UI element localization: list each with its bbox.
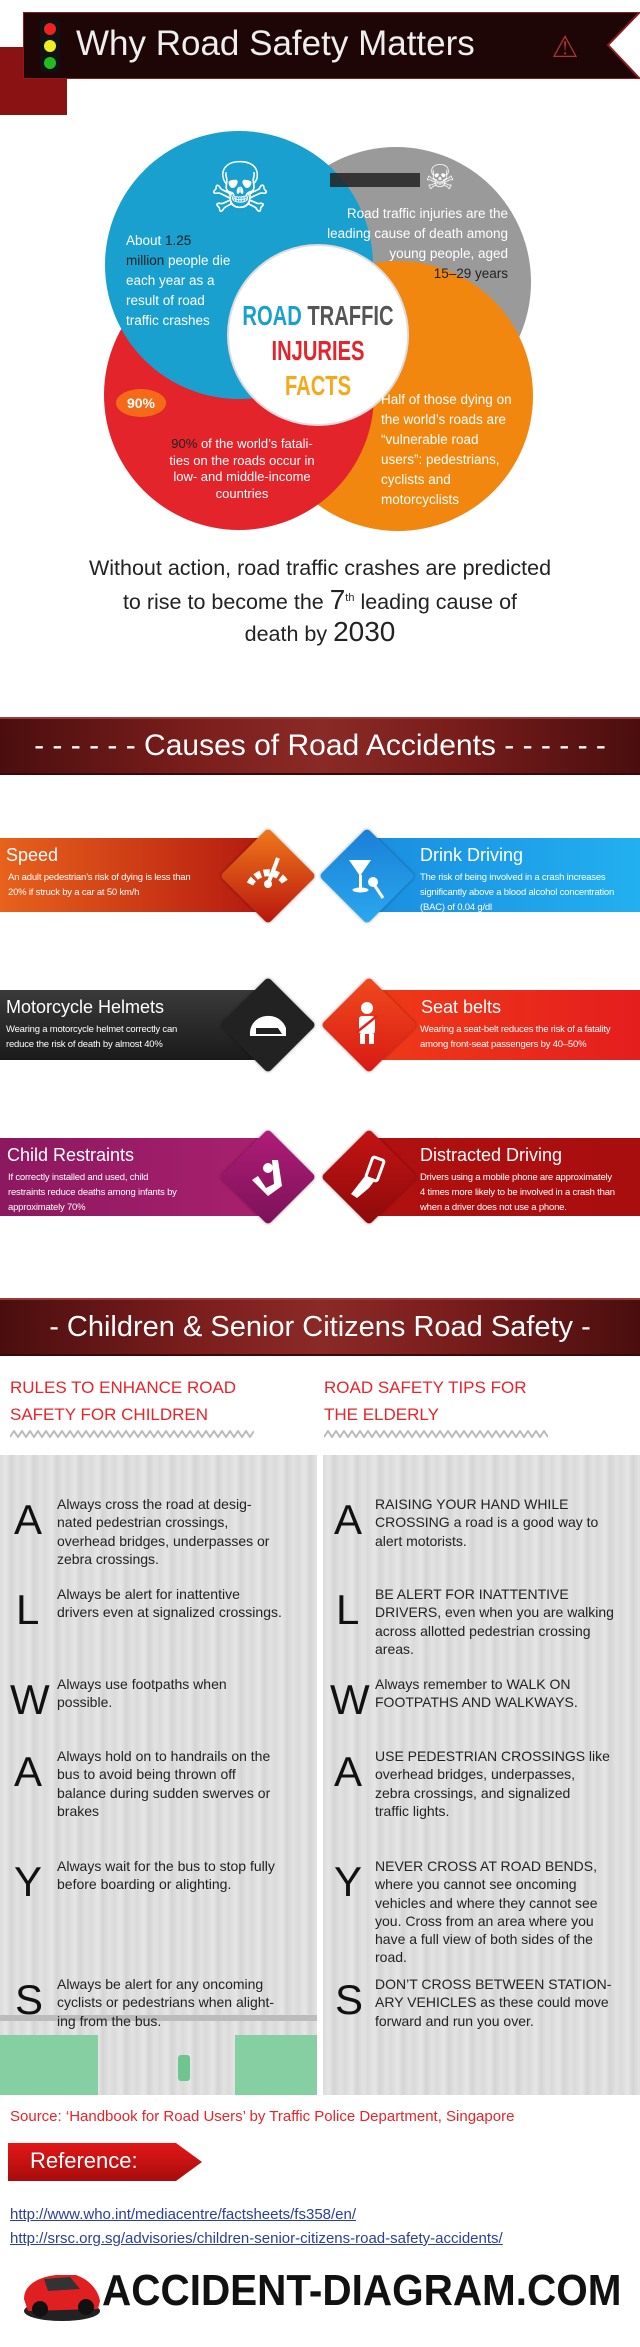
tip W: Always remember to WALK ON <box>375 1676 571 1692</box>
icon: red car <box>24 2275 100 2321</box>
rule A: zebra crossings. <box>57 1551 159 1567</box>
text: gray circle: Road traffic injuries are the <box>347 206 508 221</box>
heading text: Why Road Safety Matters <box>76 24 475 63</box>
banner: Causes of Road Accidents <box>0 717 640 775</box>
cause: Drink Driving: (BAC) of 0.04 g/dl <box>420 902 492 913</box>
rule A2: A <box>14 1748 42 1795</box>
rule A2 <box>14 1748 270 1819</box>
banner: Children & Senior Citizens Road Safety <box>0 1298 640 1356</box>
icon: speedometer <box>246 857 288 888</box>
text: orange circle: users”: pedestrians, <box>381 452 500 467</box>
text: gray circle <box>327 206 508 281</box>
tip S: DON’T CROSS BETWEEN STATION- <box>375 1976 611 1992</box>
source note: Source: ‘Handbook for Road Users’ by Traffic Police Department, Singapore <box>10 2108 514 2125</box>
cause: Child Restraints: approximately 70% <box>8 1202 85 1213</box>
center label <box>242 300 394 401</box>
icon: warning sign car: ⚠ <box>552 31 578 64</box>
badge: 90% <box>116 389 166 417</box>
banner: Children & Senior Citizens Road Safety: - Children & Senior Citizens Road Safety - <box>49 1311 591 1343</box>
rule A2: balance during sudden swerves or <box>57 1785 270 1801</box>
cause: Child Restraints: restraints reduce deaths among infants by <box>8 1187 177 1198</box>
tip A2 <box>334 1748 610 1819</box>
reference links: http://srsc.org.sg/advisories/children-senior-citizens-road-safety-accidents/ <box>10 2230 503 2247</box>
text: blue circle: million people die <box>126 253 230 268</box>
icon: cocktail and key <box>349 860 384 899</box>
text: red circle: ties on the roads occur in <box>169 452 315 468</box>
cause: Distracted Driving: Distracted Driving <box>420 1145 562 1165</box>
icon: skull blue: ☠ <box>209 149 271 227</box>
text: gray circle: 15–29 years <box>434 266 508 281</box>
rule S <box>15 1976 274 2029</box>
cause: Seat belts <box>320 976 640 1074</box>
icon: child seat <box>252 1160 282 1196</box>
icon: skull gray: ☠ <box>425 159 455 197</box>
text: blue circle: result of road <box>126 293 205 308</box>
cause: Drink Driving: Drink Driving <box>420 845 523 865</box>
tip L: L <box>336 1586 359 1633</box>
heading: rules for children <box>10 1378 254 1438</box>
cause: Speed: 20% if struck by a car at 50 km/h <box>8 887 139 898</box>
tip A2: overhead bridges, underpasses, <box>375 1766 575 1782</box>
center label: INJURIES <box>272 335 364 366</box>
rule S: S <box>15 1976 43 2023</box>
text: red circle <box>169 436 315 500</box>
cause: Distracted Driving: 4 times more likely to be involved in a crash than <box>420 1187 615 1198</box>
cause: Distracted Driving <box>320 1128 640 1226</box>
text: blue circle: each year as a <box>126 273 215 288</box>
text: prediction: to rise to become the 7th leading cause of <box>123 584 517 615</box>
tip Y: have a full view of both sides of the <box>375 1931 593 1947</box>
tip A: alert motorists. <box>375 1533 467 1549</box>
cause: Child Restraints <box>0 1128 316 1226</box>
banner: Causes of Road Accidents: - - - - - - Causes of Road Accidents - - - - - - <box>34 729 606 762</box>
reference links: http://www.who.int/mediacentre/factsheets/fs358/en/ <box>10 2206 356 2223</box>
tip Y: road. <box>375 1949 407 1965</box>
cause: Seat belts: Seat belts <box>421 997 501 1017</box>
text: orange circle: “vulnerable road <box>381 432 479 447</box>
tip L: across allotted pedestrian crossing <box>375 1623 591 1639</box>
rule W: Always use footpaths when <box>57 1676 227 1692</box>
cause: Drink Driving <box>318 828 640 924</box>
tip Y: NEVER CROSS AT ROAD BENDS, <box>375 1858 597 1874</box>
rule A: overhead bridges, underpasses or <box>57 1533 269 1549</box>
text: orange circle: the world’s roads are <box>381 412 506 427</box>
rule S: ing from the bus. <box>57 2013 161 2029</box>
tip A: CROSSING a road is a good way to <box>375 1514 598 1530</box>
rule A2: Always hold on to handrails on the <box>57 1748 270 1764</box>
cause: Motorcycle Helmets: reduce the risk of death by almost 40% <box>6 1039 163 1050</box>
tip S: ARY VEHICLES as these could move <box>375 1994 609 2010</box>
text: orange circle: motorcyclists <box>381 492 459 507</box>
rule L <box>16 1586 282 1633</box>
tip A: A <box>334 1496 362 1543</box>
tip A2: USE PEDESTRIAN CROSSINGS like <box>375 1748 610 1764</box>
text: prediction <box>89 556 551 647</box>
cause: Seat belts: among front-seat passengers by 40–50% <box>420 1039 586 1050</box>
text: blue circle: About 1.25 <box>126 233 191 248</box>
tip L: DRIVERS, even when you are walking <box>375 1604 614 1620</box>
cause: Drink Driving: The risk of being involved in a crash increases <box>420 872 605 883</box>
cause: Motorcycle Helmets: Wearing a motorcycle helmet correctly can <box>6 1024 177 1035</box>
rule L: Always be alert for inattentive <box>57 1586 240 1602</box>
tip W: W <box>330 1676 370 1723</box>
text: orange circle <box>381 392 512 507</box>
rule W: possible. <box>57 1694 112 1710</box>
panel: elderly tips <box>323 1455 640 2095</box>
cause: Seat belts: Wearing a seat-belt reduces the risk of a fatality <box>420 1024 610 1035</box>
tip Y: where you cannot see oncoming <box>375 1876 577 1892</box>
road illustration <box>0 2035 98 2095</box>
venn diagram: road traffic injuries facts <box>104 131 533 531</box>
rule Y: Y <box>14 1858 42 1905</box>
text: prediction: death by 2030 <box>245 616 395 647</box>
cause: Drink Driving: significantly above a blood alcohol concentration <box>420 887 614 898</box>
panel: children rules <box>0 1455 317 2095</box>
heading: tips for elderly: ROAD SAFETY TIPS FOR <box>324 1378 526 1397</box>
rule S: cyclists or pedestrians when alight- <box>57 1994 274 2010</box>
reference links <box>10 2206 503 2247</box>
reference tag: Reference: <box>30 2148 138 2173</box>
rule W <box>10 1676 227 1723</box>
text: orange circle: cyclists and <box>381 472 451 487</box>
tip Y <box>334 1858 598 1965</box>
cause: Speed: Speed <box>6 845 58 865</box>
cause: Motorcycle Helmets <box>0 976 316 1074</box>
tip Y: vehicles and where they cannot see <box>375 1895 598 1911</box>
badge: 90%: 90% <box>127 395 155 411</box>
center label: FACTS <box>285 370 351 401</box>
tip W <box>330 1676 578 1723</box>
rule A: nated pedestrian crossings, <box>57 1514 228 1530</box>
center label: ROAD TRAFFIC <box>242 300 394 331</box>
tip A: RAISING YOUR HAND WHILE <box>375 1496 568 1512</box>
tip S: S <box>335 1976 363 2023</box>
text: gray circle: leading cause of death among <box>327 226 508 241</box>
icon: helmet <box>250 1016 286 1036</box>
tip A2: A <box>334 1748 362 1795</box>
cause: Child Restraints: Child Restraints <box>7 1145 134 1165</box>
logo: accident-diagram.com: ACCIDENT-DIAGRAM.COM <box>102 2266 621 2315</box>
cause: Distracted Driving: when a driver does not use a phone. <box>420 1202 567 1213</box>
icon: hand with phone <box>351 1156 386 1198</box>
heading: rules for children: RULES TO ENHANCE ROAD <box>10 1378 236 1397</box>
tip Y: Y <box>334 1858 362 1905</box>
rule Y: before boarding or alighting. <box>57 1876 231 1892</box>
rule A <box>14 1496 270 1567</box>
tip L: BE ALERT FOR INATTENTIVE <box>375 1586 569 1602</box>
text: blue circle: traffic crashes <box>126 313 210 328</box>
heading: tips for elderly <box>324 1378 548 1438</box>
rule A2: brakes <box>57 1803 99 1819</box>
tip A2: traffic lights. <box>375 1803 449 1819</box>
tip A <box>334 1496 598 1549</box>
tip S <box>335 1976 611 2029</box>
icon: seat belt person <box>356 1002 378 1044</box>
text: blue circle <box>126 233 230 328</box>
cause: Speed <box>0 828 316 924</box>
cause: Speed: An adult pedestrian’s risk of dying is less than <box>8 872 190 883</box>
text: gray circle: young people, aged <box>389 246 508 261</box>
cause: Distracted Driving: Drivers using a mobile phone are approximately <box>420 1172 612 1183</box>
heading: rules for children: SAFETY FOR CHILDREN <box>10 1405 208 1424</box>
rule Y <box>14 1858 275 1905</box>
text: red circle: countries <box>216 486 268 500</box>
tip W: FOOTPATHS AND WALKWAYS. <box>375 1694 578 1710</box>
rule Y: Always wait for the bus to stop fully <box>57 1858 275 1874</box>
title banner: Why Road Safety Matters <box>0 12 640 115</box>
heading: tips for elderly: THE ELDERLY <box>324 1405 439 1424</box>
rule S: Always be alert for any oncoming <box>57 1976 263 1992</box>
tip A2: zebra crossings, and signalized <box>375 1785 570 1801</box>
text: red circle: low- and middle-income <box>173 469 311 484</box>
cause: Motorcycle Helmets: Motorcycle Helmets <box>6 997 164 1017</box>
cause: Child Restraints: If correctly installed and used, child <box>8 1172 148 1183</box>
text: orange circle: Half of those dying on <box>381 392 512 407</box>
rule W: W <box>10 1676 50 1723</box>
tip Y: you. Cross from an area where you <box>375 1913 594 1929</box>
rule A: A <box>14 1496 42 1543</box>
rule L: drivers even at signalized crossings. <box>57 1604 282 1620</box>
tip L <box>336 1586 614 1657</box>
rule L: L <box>16 1586 39 1633</box>
rule A2: bus to avoid being thrown off <box>57 1766 236 1782</box>
tip L: areas. <box>375 1641 414 1657</box>
text: prediction: Without action, road traffic crashes are predicted <box>89 556 551 580</box>
text: red circle: 90% of the world’s fatali- <box>171 436 313 451</box>
reference tag <box>8 2143 202 2181</box>
icon: traffic light <box>40 20 60 72</box>
tip S: forward and run you over. <box>375 2013 534 2029</box>
rule A: Always cross the road at desig- <box>57 1496 252 1512</box>
